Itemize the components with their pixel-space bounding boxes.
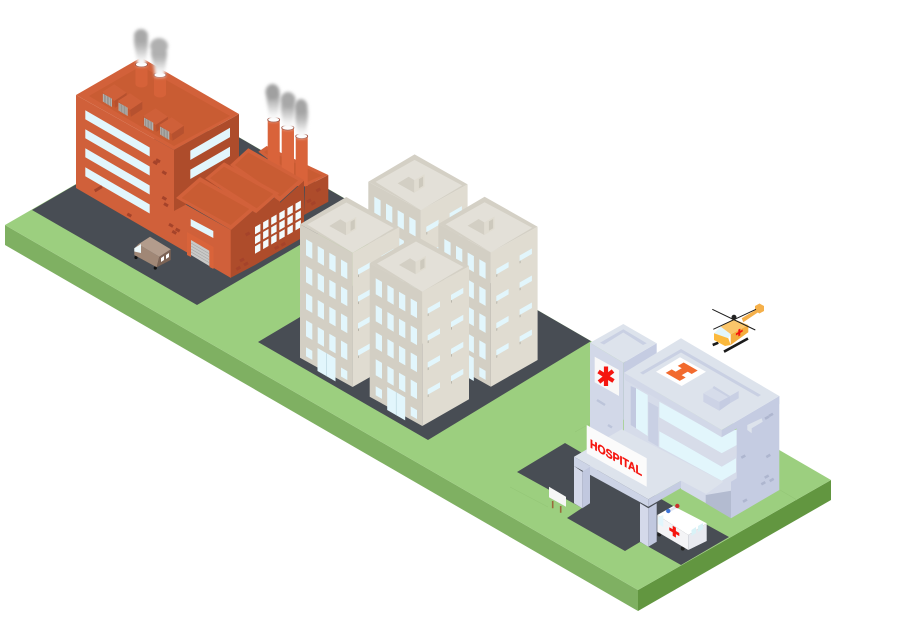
factory main right wall [174, 114, 239, 211]
entrance canopy [574, 429, 723, 507]
apartment tower: front [370, 236, 469, 427]
hospital sign: HOSPITAL [590, 436, 642, 479]
factory main roof [76, 58, 239, 150]
asterisk sign [595, 357, 619, 396]
smoke plumes [134, 29, 308, 138]
glazing [631, 386, 738, 481]
factory side windows [190, 128, 230, 179]
roof vent units [102, 84, 184, 141]
hospital main wall [624, 373, 737, 510]
hospital [574, 324, 779, 547]
wall detailing [741, 414, 774, 502]
sawtooth hall walls [231, 181, 304, 278]
factory roof chimneys [136, 62, 166, 98]
lot signboard [549, 487, 566, 513]
hospital eaves [624, 373, 779, 437]
apartment tower: right [438, 197, 538, 388]
ground slab [5, 114, 831, 611]
road: factory lot [32, 125, 362, 305]
factory back block [258, 146, 328, 215]
apartment tower: left [300, 197, 399, 388]
factory long windows [85, 110, 150, 213]
hall small window [191, 219, 213, 238]
road: hospital lot [517, 443, 729, 565]
road: apartment lot [258, 244, 591, 440]
hospital tall block [590, 324, 657, 470]
helipad [656, 357, 706, 386]
factory rear smokestacks [268, 117, 308, 186]
hall window grid [255, 200, 301, 254]
hospital right wall [731, 396, 779, 518]
delivery van [134, 237, 171, 270]
factory main left wall [76, 95, 231, 278]
canopy pillars [574, 466, 657, 547]
factory [76, 29, 328, 278]
loading door [187, 232, 214, 269]
hospital sign [587, 425, 647, 487]
factory bricks [95, 160, 320, 269]
ambulance [657, 504, 707, 550]
helicopter [712, 304, 764, 352]
garage recess [706, 491, 731, 518]
hospital roof [624, 338, 779, 430]
roof plant box [703, 386, 739, 411]
apartment tower: back [368, 154, 468, 346]
sawtooth roofs [176, 148, 304, 230]
